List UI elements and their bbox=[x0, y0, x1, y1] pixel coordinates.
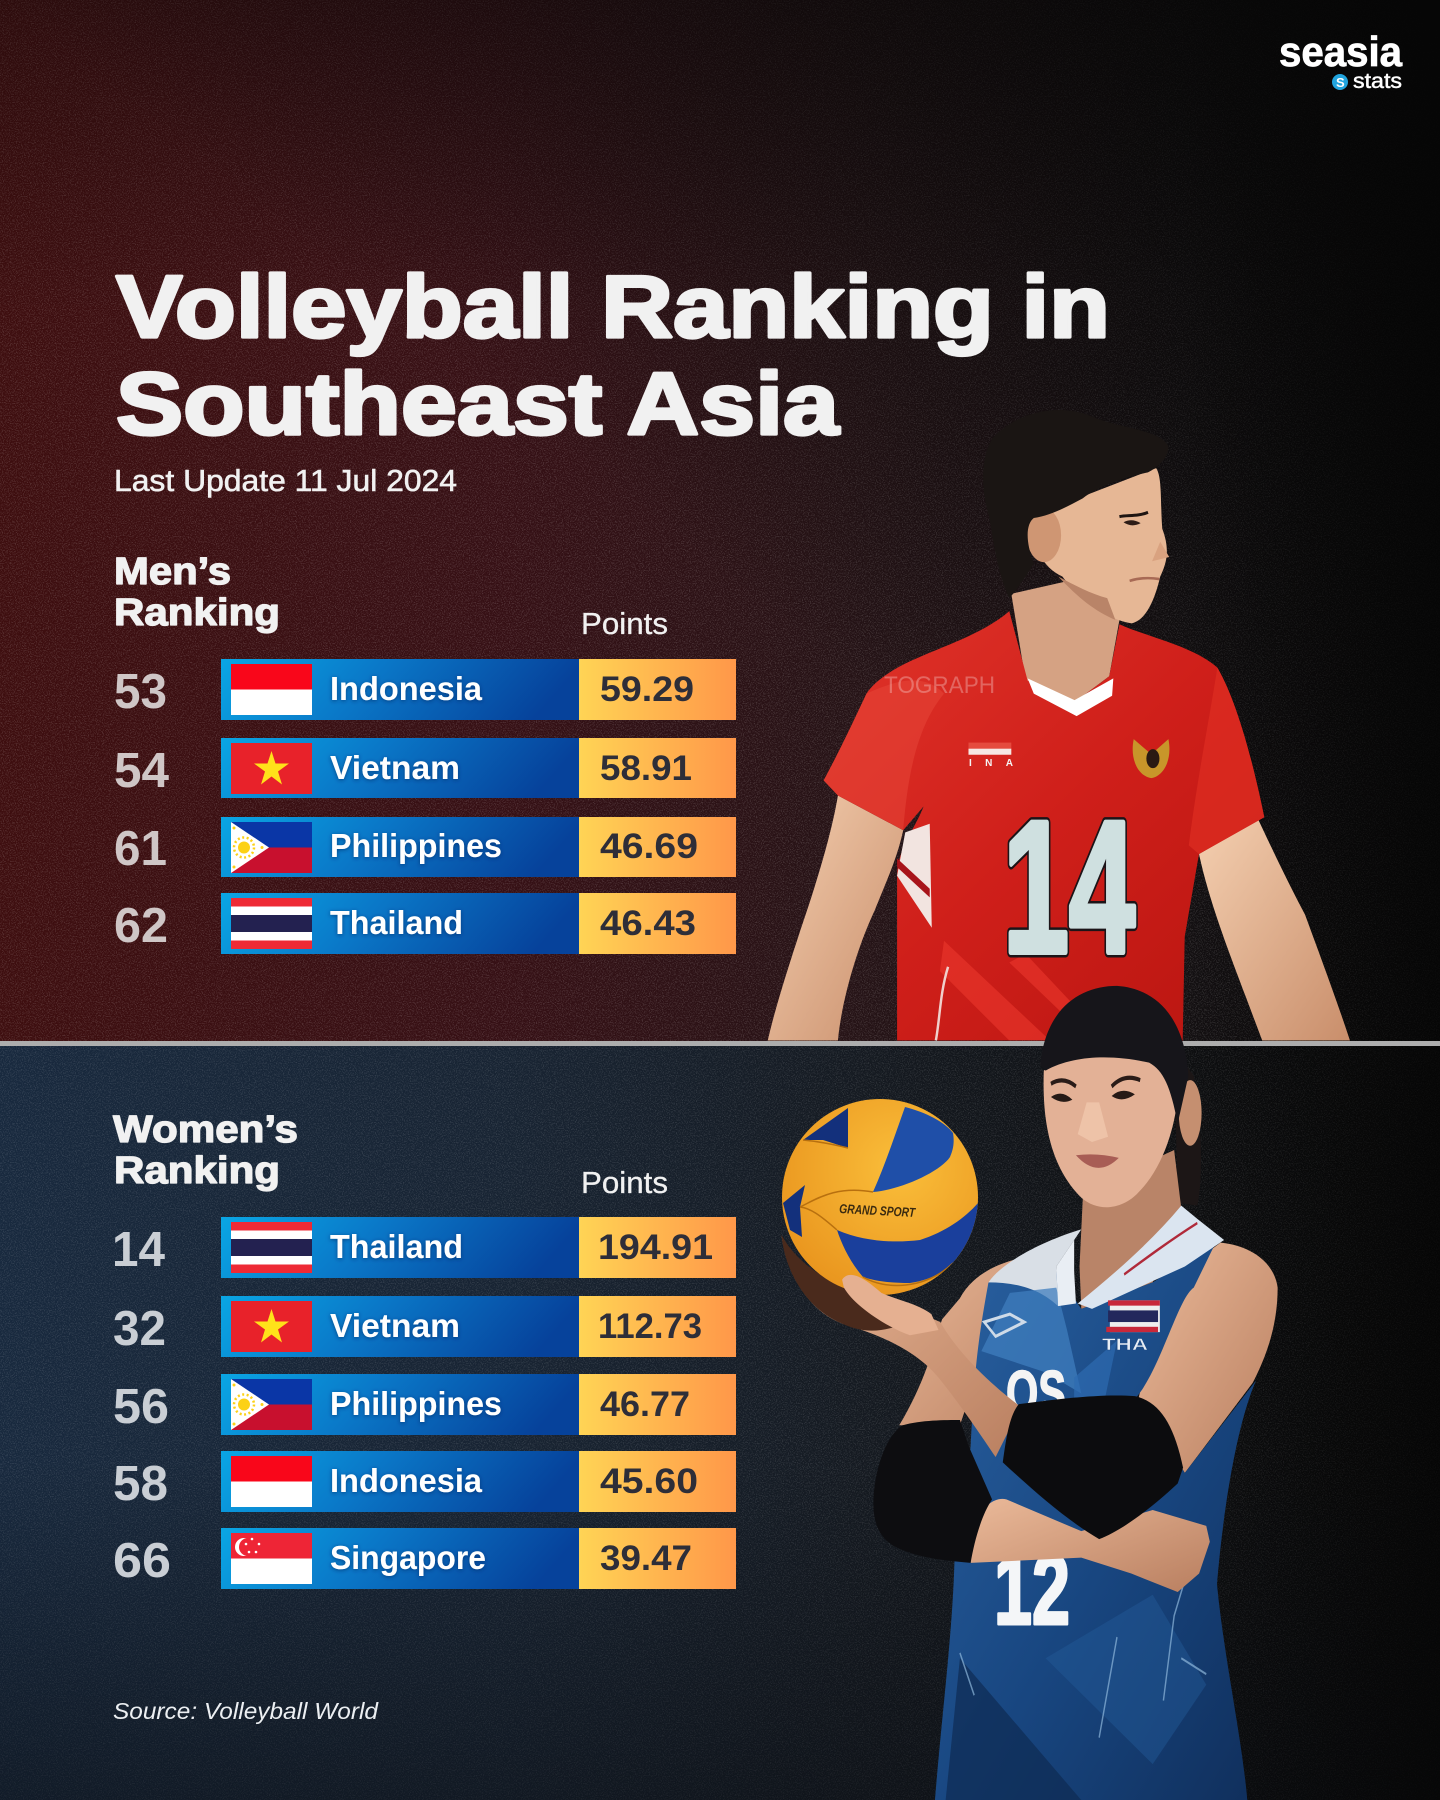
row: Indonesia 53 bbox=[114, 659, 736, 720]
logo: seasia stats: stats bbox=[1353, 70, 1402, 93]
row: Singapore 66: 39.47 bbox=[600, 1539, 692, 1578]
row: Vietnam 32: 32 bbox=[113, 1302, 166, 1356]
row: Thailand 14: Thailand bbox=[330, 1228, 463, 1265]
row: Philippines 56: Philippines bbox=[330, 1385, 502, 1422]
jersey label: THA: THA bbox=[1102, 1335, 1148, 1354]
row: Indonesia 58: Indonesia bbox=[330, 1462, 483, 1499]
heading: men's ranking bbox=[114, 551, 280, 634]
row: Thailand 62: Thailand bbox=[330, 904, 463, 941]
row: Vietnam 32 bbox=[113, 1296, 736, 1357]
row: Indonesia 58 bbox=[113, 1451, 736, 1512]
jersey number: 14: 14 bbox=[1003, 782, 1135, 992]
row: Vietnam 54: Vietnam bbox=[330, 749, 460, 786]
row: Vietnam 54 bbox=[114, 738, 736, 798]
row: Thailand 14 bbox=[112, 1217, 736, 1278]
logo: seasia stats: seasia bbox=[1279, 28, 1403, 75]
row: Singapore 66: Singapore bbox=[330, 1539, 486, 1576]
heading: men's ranking: Ranking bbox=[114, 592, 280, 634]
panel: women's background bbox=[0, 1046, 1440, 1800]
row: Thailand 62: 46.43 bbox=[600, 904, 696, 943]
jersey number: 14: 14 bbox=[1003, 782, 1135, 992]
row: Philippines 61 bbox=[114, 817, 736, 877]
row: Indonesia 53: 53 bbox=[114, 665, 167, 719]
row: Indonesia 53: Indonesia bbox=[330, 670, 483, 707]
icon: volleyball bbox=[782, 1099, 978, 1295]
heading: women's ranking: Ranking bbox=[114, 1150, 280, 1192]
row: Indonesia 58: 58 bbox=[113, 1457, 168, 1511]
row: Thailand 62 bbox=[114, 893, 736, 954]
row: Vietnam 32: 112.73 bbox=[598, 1307, 702, 1346]
jersey number: 12: 12 bbox=[994, 1534, 1070, 1646]
illustration: male player in red jersey bbox=[768, 410, 1350, 1041]
row: Vietnam 54: 58.91 bbox=[600, 749, 692, 788]
row: Thailand 62: 62 bbox=[114, 899, 168, 953]
row: Philippines 61: 46.69 bbox=[600, 827, 698, 866]
column label: men's points: Points bbox=[581, 606, 668, 641]
row: Singapore 66: 66 bbox=[113, 1534, 171, 1588]
ball label: GRAND SPORT: GRAND SPORT bbox=[839, 1201, 916, 1220]
jersey patch text: INA: INA bbox=[969, 758, 1013, 769]
row: Vietnam 54: 54 bbox=[114, 744, 169, 798]
heading: men's ranking: Men’s bbox=[114, 551, 231, 593]
row: Vietnam 32: Vietnam bbox=[330, 1307, 460, 1344]
row: Philippines 61: Philippines bbox=[330, 827, 502, 864]
table: men's ranking bbox=[114, 659, 736, 954]
title bbox=[116, 257, 1110, 453]
watermark: TOGRAPH: TOGRAPH bbox=[884, 672, 995, 699]
row: Thailand 14: 14 bbox=[112, 1223, 165, 1277]
panel: men's background bbox=[0, 0, 1440, 1042]
source note: Source: Volleyball World bbox=[113, 1698, 379, 1724]
column label: women's points: Points bbox=[581, 1165, 668, 1200]
row: Philippines 56 bbox=[113, 1374, 736, 1435]
row: Singapore 66 bbox=[113, 1528, 736, 1589]
jersey number: 14 bbox=[1007, 817, 1138, 958]
heading: women's ranking: Women’s bbox=[113, 1109, 298, 1151]
logo: seasia stats: S bbox=[1336, 75, 1345, 90]
table: women's ranking bbox=[112, 1217, 736, 1589]
title: Volleyball Ranking in bbox=[116, 257, 1110, 356]
row: Philippines 56: 56 bbox=[113, 1380, 169, 1434]
illustration: female player with volleyball bbox=[781, 986, 1278, 1800]
heading: women's ranking bbox=[113, 1109, 298, 1192]
jersey sponsor letters: OS bbox=[1006, 1359, 1066, 1428]
row: Philippines 61: 61 bbox=[114, 822, 167, 876]
title: Southeast Asia bbox=[116, 354, 840, 453]
row: Philippines 56: 46.77 bbox=[600, 1385, 690, 1424]
hand thumb on ball bbox=[842, 1275, 938, 1335]
subtitle: last update: Last Update 11 Jul 2024 bbox=[114, 463, 457, 498]
row: Indonesia 53: 59.29 bbox=[600, 670, 694, 709]
row: Thailand 14: 194.91 bbox=[598, 1228, 713, 1267]
row: Indonesia 58: 45.60 bbox=[600, 1462, 698, 1501]
